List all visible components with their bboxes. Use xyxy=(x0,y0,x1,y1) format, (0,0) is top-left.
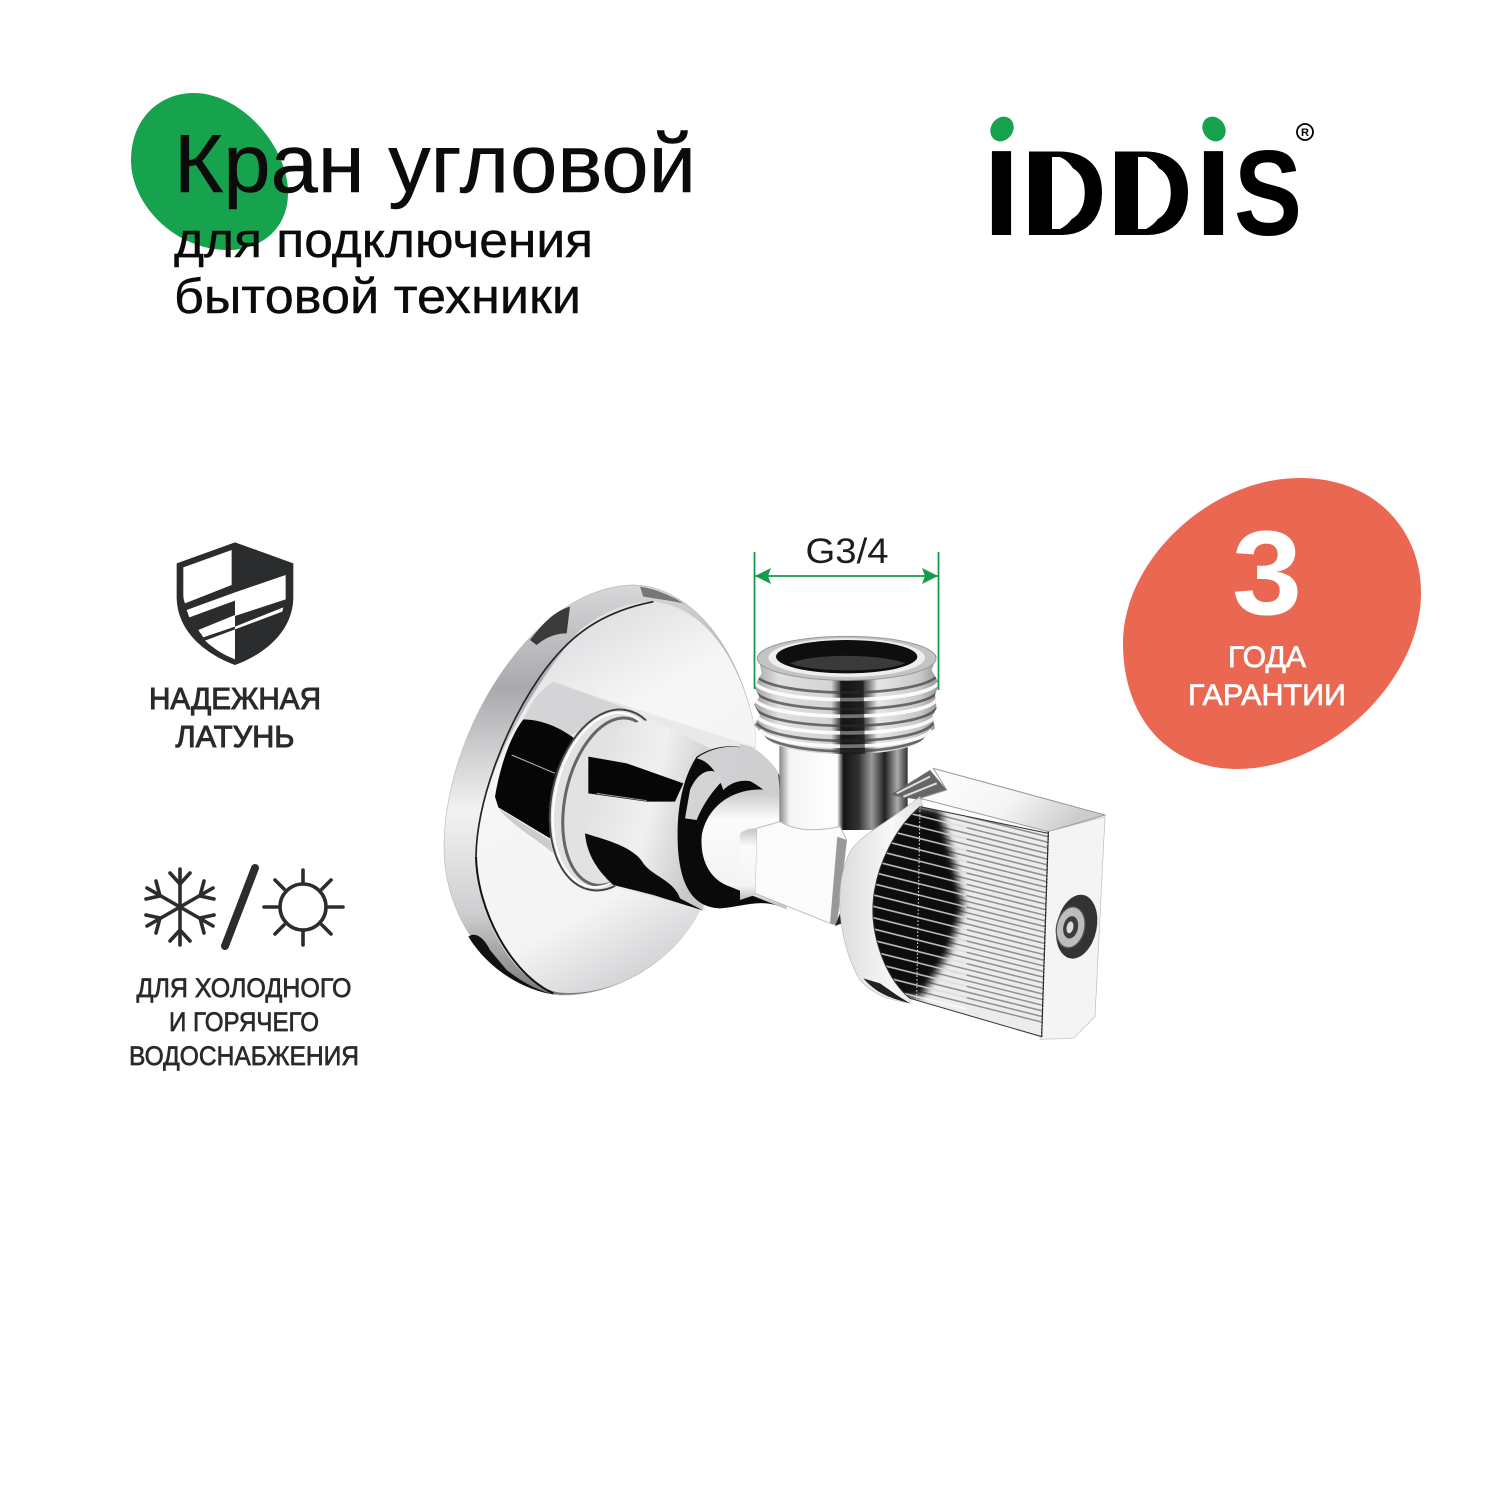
hex screw xyxy=(1050,891,1103,962)
label: reliable brass xyxy=(149,681,321,754)
male thread xyxy=(754,654,938,754)
thread, stem, body and handle xyxy=(740,636,1105,1043)
dimension: G3/4: G3/4 xyxy=(806,532,888,571)
logo: IDDIS: I xyxy=(1195,125,1232,261)
warranty badge xyxy=(1123,478,1421,769)
label: cold and hot water supply: И ГОРЯЧЕГО xyxy=(169,1007,319,1037)
warranty badge: 3 xyxy=(1232,506,1302,640)
icon: shield xyxy=(177,542,293,665)
logo: IDDIS: R xyxy=(1301,127,1309,139)
icon: snowflake xyxy=(146,869,214,945)
warranty badge: ГОДА xyxy=(1228,641,1306,674)
logo: IDDIS xyxy=(983,112,1313,261)
logo: IDDIS: I xyxy=(983,125,1020,261)
label: cold and hot water supply xyxy=(129,973,359,1071)
title: Кран угловой xyxy=(174,117,696,210)
subtitle xyxy=(174,214,593,324)
dimension: G3/4 xyxy=(754,532,938,690)
warranty badge: ГАРАНТИИ xyxy=(1188,679,1346,712)
product photo: angle valve xyxy=(444,585,1105,1043)
flange and hub xyxy=(444,585,787,995)
threaded ring xyxy=(534,699,683,901)
logo: IDDIS: D xyxy=(1107,125,1193,261)
label: cold and hot water supply: ВОДОСНАБЖЕНИЯ xyxy=(129,1041,359,1071)
label: cold and hot water supply: ДЛЯ ХОЛОДНОГО xyxy=(136,973,352,1003)
icon: sun xyxy=(264,870,343,945)
base plate hub xyxy=(497,682,755,910)
logo: IDDIS: S xyxy=(1234,125,1302,261)
subtitle: бытовой техники xyxy=(174,270,581,324)
collar xyxy=(678,746,780,908)
icon: slash separator xyxy=(225,868,255,946)
green accent blob xyxy=(131,93,288,250)
handle xyxy=(920,768,1105,832)
label: reliable brass: ЛАТУНЬ xyxy=(176,719,294,754)
subtitle: для подключения xyxy=(174,214,593,268)
label: reliable brass: НАДЕЖНАЯ xyxy=(149,681,321,716)
logo: IDDIS: D xyxy=(1021,125,1107,261)
cone xyxy=(583,720,713,910)
